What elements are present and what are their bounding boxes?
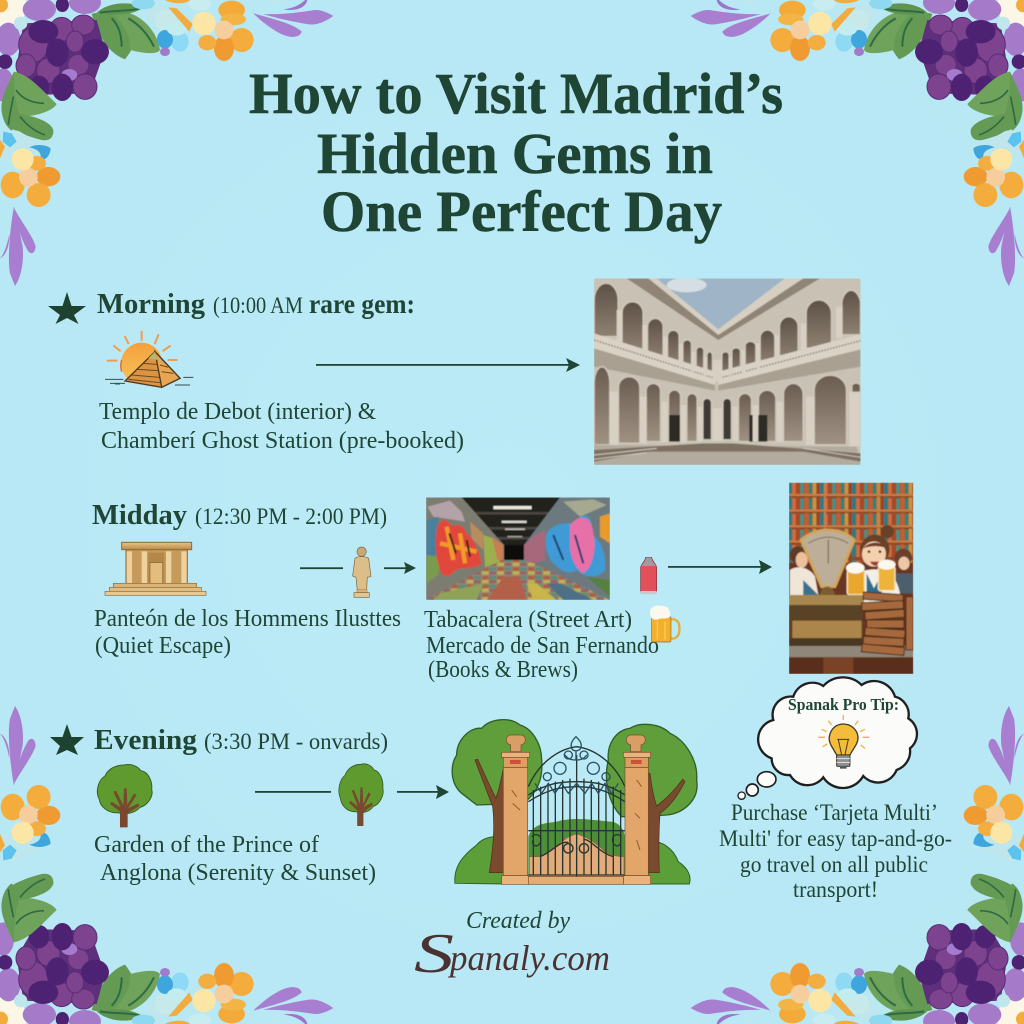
text: pro tip body: transport! [793, 877, 878, 902]
text: tabacalera and mercado [424, 607, 659, 683]
heading: morning: Morning [97, 288, 205, 320]
text: tabacalera and mercado: Mercado de San Fernando [426, 633, 659, 659]
photo: graffiti tunnel [426, 497, 610, 600]
icon: tree one [97, 765, 152, 827]
icon: star evening [50, 724, 84, 755]
text: tabacalera and mercado: (Books & Brews) [428, 657, 578, 683]
icon: star morning [48, 292, 86, 324]
text: pantheon [94, 606, 401, 659]
text: tabacalera and mercado: Tabacalera (Street Art) [424, 607, 632, 633]
icon: light bulb [818, 715, 869, 769]
illustration: garden gate [452, 720, 697, 884]
text: garden: Anglona (Serenity & Sunset) [100, 860, 376, 886]
title: How to Visit Madrid’s [249, 61, 783, 126]
text: pro tip body: Purchase ‘Tarjeta Multi’ [731, 800, 938, 825]
text: pro tip body: Multi' for easy tap-and-go- [719, 826, 952, 851]
credit: Spanaly.com: panaly.com [447, 938, 610, 978]
icon: sunrise pyramid [105, 332, 193, 387]
title: Hidden Gems in [317, 121, 713, 186]
text: morning stops [99, 399, 464, 454]
credit: Spanaly.com: S [414, 923, 454, 985]
credit: created by: Created by [466, 908, 570, 934]
heading: evening: (3:30 PM - onvards) [204, 729, 388, 755]
heading: midday: (12:30 PM - 2:00 PM) [195, 504, 387, 530]
heading: morning: rare gem: [309, 289, 415, 319]
text: garden: Garden of the Prince of [94, 832, 319, 858]
text: morning stops: Chamberí Ghost Station (pre-booked) [101, 428, 464, 454]
icon: statue [353, 547, 371, 597]
floral corner: bottom right [691, 706, 1024, 1024]
callout: pro tip thought bubble [738, 677, 917, 799]
text: pro tip body [719, 800, 952, 902]
floral corner: bottom left [0, 706, 333, 1024]
floral corner: top right [691, 0, 1024, 286]
heading: morning: (10:00 AM [213, 293, 303, 318]
title: One Perfect Day [321, 179, 722, 244]
text: pro tip heading: Spanak Pro Tip: [788, 695, 899, 714]
text: garden [94, 832, 376, 886]
icon: beer mug [650, 605, 679, 642]
text: pro tip body: go travel on all public [740, 852, 928, 877]
floral corner: top left [0, 0, 333, 286]
photo: courtyard arcade [594, 278, 861, 465]
heading: morning [97, 288, 415, 320]
icon: pantheon mausoleum [105, 542, 206, 595]
text: morning stops: Templo de Debot (interior) & [99, 399, 376, 425]
credit: Spanaly.com [414, 923, 610, 985]
arrows: evening [255, 785, 449, 799]
heading: evening: Evening [94, 724, 198, 756]
text: pantheon: (Quiet Escape) [95, 633, 231, 659]
heading: midday [92, 499, 387, 531]
title [249, 61, 783, 244]
photo: book market [789, 483, 913, 674]
arrow: morning [316, 358, 580, 372]
text: pantheon: Panteón de los Hommens Ilusttes [94, 606, 401, 632]
arrow: to market [668, 560, 772, 574]
arrows: midday first leg [300, 562, 416, 574]
heading: midday: Midday [92, 499, 187, 531]
heading: evening [94, 724, 388, 756]
icon: tree two [339, 764, 383, 826]
icon: spray can [641, 557, 657, 594]
